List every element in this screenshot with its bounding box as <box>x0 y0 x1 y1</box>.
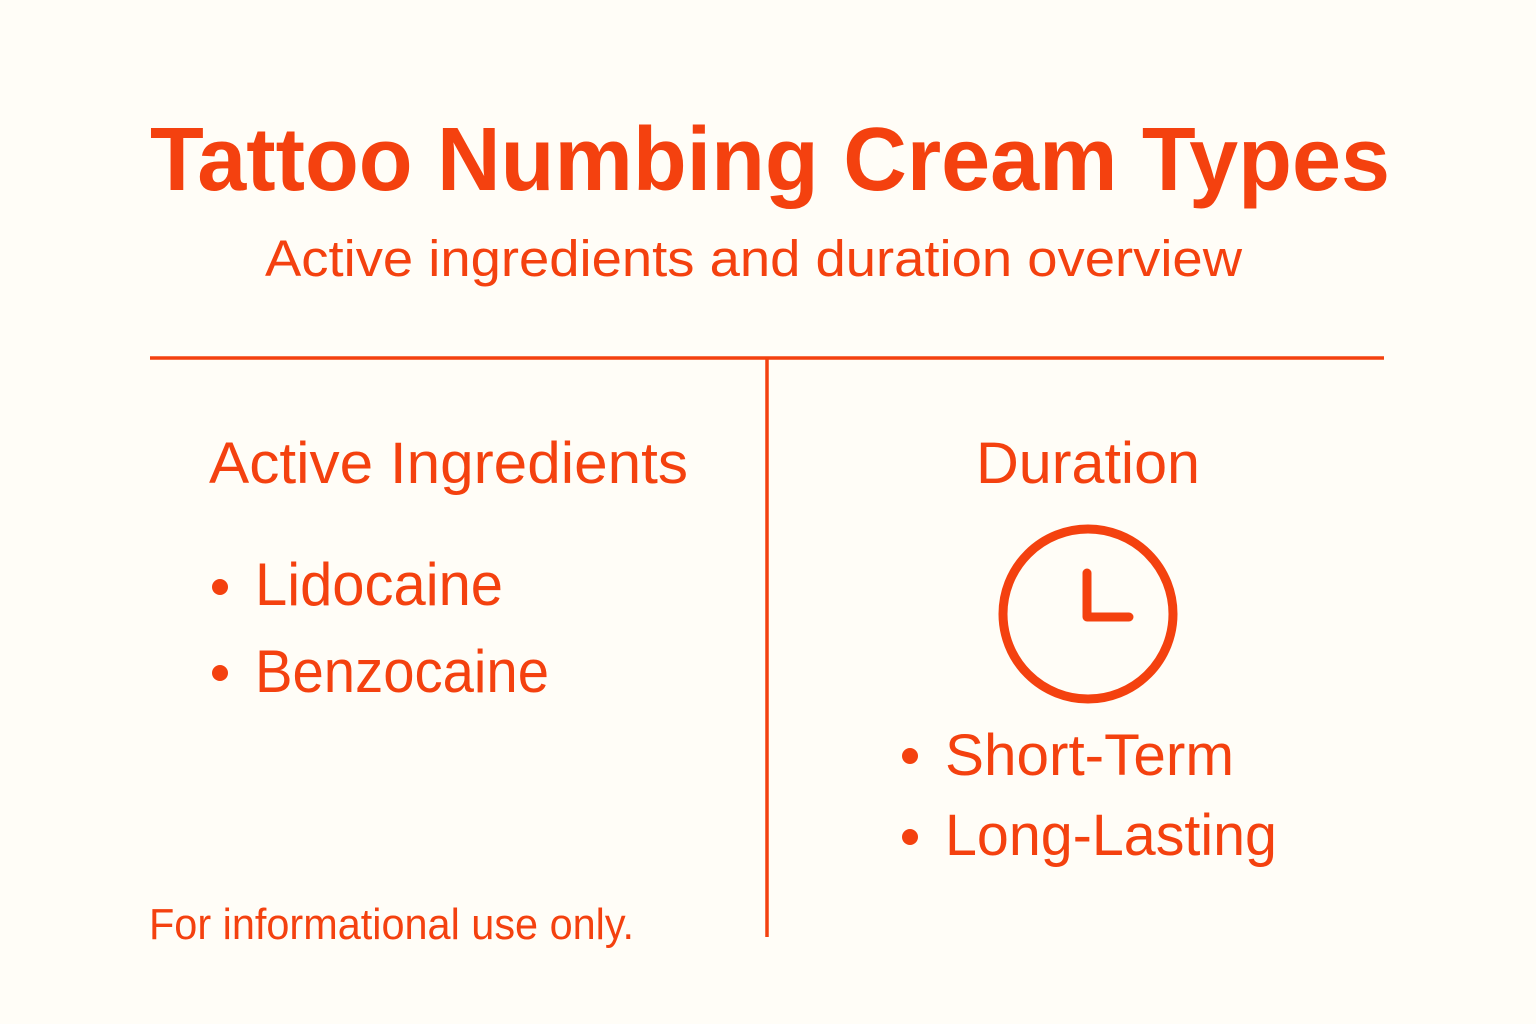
footer note: For informational use only. <box>149 900 634 949</box>
title: Tattoo Numbing Cream Types <box>150 110 1390 210</box>
list item: short-term: Short-Term <box>945 723 1234 788</box>
heading: active ingredients: Active Ingredients <box>209 431 688 496</box>
icon: clock <box>1003 529 1173 699</box>
list item: long-lasting: Long-Lasting <box>945 803 1277 868</box>
list item: benzocaine: Benzocaine <box>255 638 549 705</box>
panel: active ingredients <box>209 431 688 705</box>
subtitle: Active ingredients and duration overview <box>265 230 1242 287</box>
heading: duration: Duration <box>976 431 1200 496</box>
list item: lidocaine: Lidocaine <box>255 551 503 618</box>
panel: duration <box>902 431 1277 868</box>
